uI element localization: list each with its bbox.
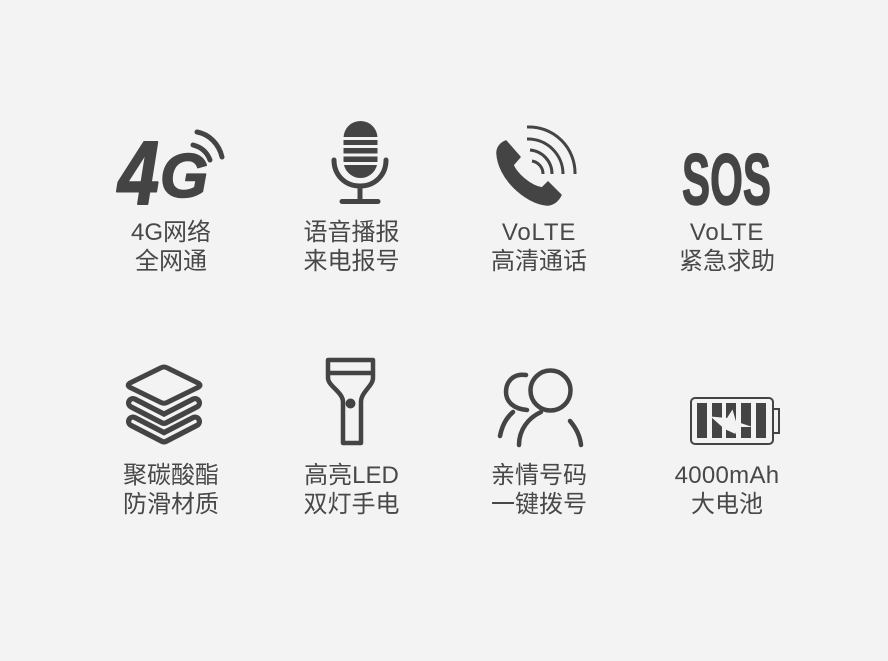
label: one-touch family dial: 亲情号码 [491,462,587,489]
icon: microphone [334,121,386,202]
label: 4000mAh battery: 大电池 [691,491,763,518]
panel: polycarbonate [123,367,219,518]
label: one-touch family dial [491,462,587,518]
icon: two people [500,370,581,445]
label: one-touch family dial: 一键拨号 [491,491,587,518]
label: polycarbonate anti-slip [123,462,219,518]
label: VoLTE emergency call: 紧急求助 [679,248,775,275]
label: 4G network [131,219,211,275]
label: VoLTE emergency call: VoLTE [690,219,764,246]
icon: 4G signal [116,124,222,224]
label: VoLTE HD calling: 高清通话 [491,248,587,275]
label: polycarbonate anti-slip: 防滑材质 [123,491,219,518]
label: 4G network: 全网通 [135,248,207,275]
label: 4G network: 4G网络 [131,219,211,246]
label: 4000mAh battery: 4000mAh [675,462,779,489]
icon: phone with waves [497,127,575,205]
panel: family numbers [491,370,587,518]
panel: voice announcement [304,121,400,275]
label: VoLTE emergency call [679,219,775,275]
icon: 4G signal: G [160,142,208,211]
icon: flashlight [328,360,373,443]
label: 4000mAh battery [675,462,779,518]
panel: VoLTE HD calling [491,127,587,275]
label: voice announcement: 来电报号 [304,248,400,275]
label: voice announcement [304,219,400,275]
icon: layered material [128,367,200,438]
icon: battery [691,398,779,444]
panel: LED flashlight [304,360,400,518]
label: voice announcement: 语音播报 [304,219,400,246]
label: VoLTE HD calling [491,219,587,275]
icon: SOS: SOS [682,141,771,220]
label: VoLTE HD calling: VoLTE [502,219,576,246]
label: LED flashlight: 双灯手电 [304,491,400,518]
icon: 4G signal: 4 [116,124,159,224]
panel: VoLTE SOS [679,141,775,275]
label: LED flashlight: 高亮LED [304,462,399,489]
label: LED flashlight [304,462,400,518]
label: polycarbonate anti-slip: 聚碳酸酯 [123,462,219,489]
panel: battery [675,398,779,518]
panel: 4G network [116,124,222,275]
